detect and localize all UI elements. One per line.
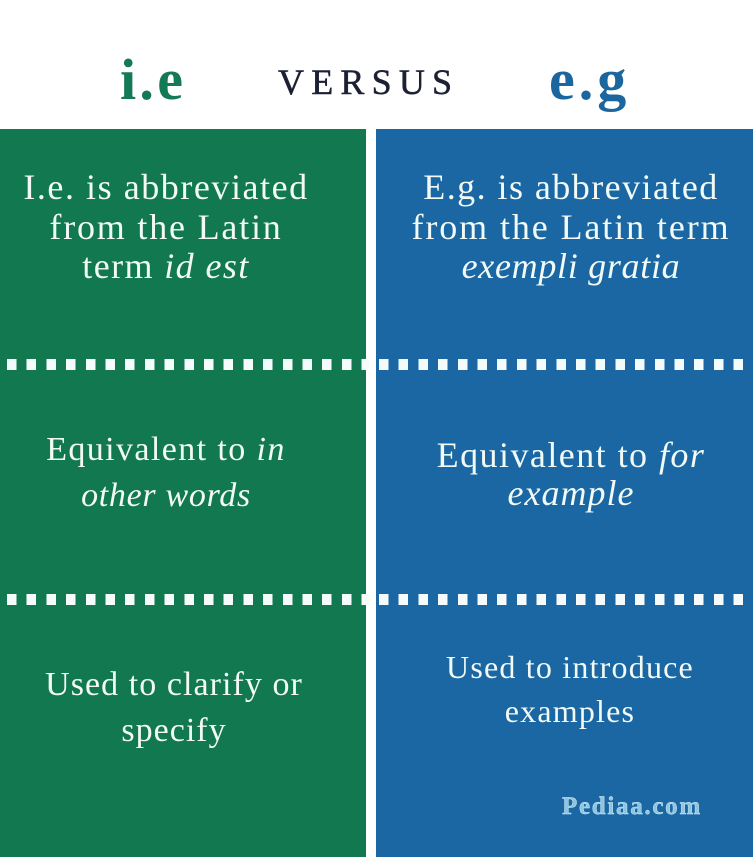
- text: e.g origin: [411, 167, 730, 286]
- panel: i.e column: [0, 129, 366, 857]
- text: e.g origin: exempli gratia: [462, 246, 680, 286]
- divider: second row left: [7, 594, 369, 605]
- panel: e.g column: [376, 129, 753, 857]
- text: i.e meaning: [46, 431, 286, 514]
- text: e.g usage: [446, 649, 694, 729]
- divider: second row right: [379, 594, 753, 605]
- text: e.g meaning: [437, 435, 705, 513]
- text: i.e origin: I.e. is abbreviated: [23, 167, 309, 207]
- heading: e.g: e.g: [549, 47, 630, 112]
- text: e.g meaning: example: [508, 473, 634, 513]
- text: i.e origin: [23, 167, 309, 286]
- text: i.e origin: from the Latin: [49, 207, 283, 247]
- logo: Pediaa.com: Pediaa.com: [562, 793, 702, 820]
- text: e.g origin: from the Latin term: [411, 207, 730, 247]
- text: i.e usage: Used to clarify or: [45, 666, 303, 703]
- text: i.e origin: term id est: [82, 246, 250, 286]
- text: e.g origin: E.g. is abbreviated: [423, 167, 719, 207]
- text: e.g meaning: Equivalent to for: [437, 435, 705, 475]
- text: e.g usage: examples: [505, 693, 635, 729]
- text: i.e usage: specify: [121, 712, 227, 749]
- divider: first row left: [7, 359, 369, 370]
- divider: first row right: [379, 359, 753, 370]
- text: e.g usage: Used to introduce: [446, 649, 694, 685]
- text: i.e meaning: other words: [81, 477, 251, 514]
- text: i.e usage: [45, 666, 303, 749]
- heading: i.e: i.e: [120, 47, 186, 112]
- text: i.e meaning: Equivalent to in: [46, 431, 286, 468]
- heading: versus: VERSUS: [278, 62, 459, 102]
